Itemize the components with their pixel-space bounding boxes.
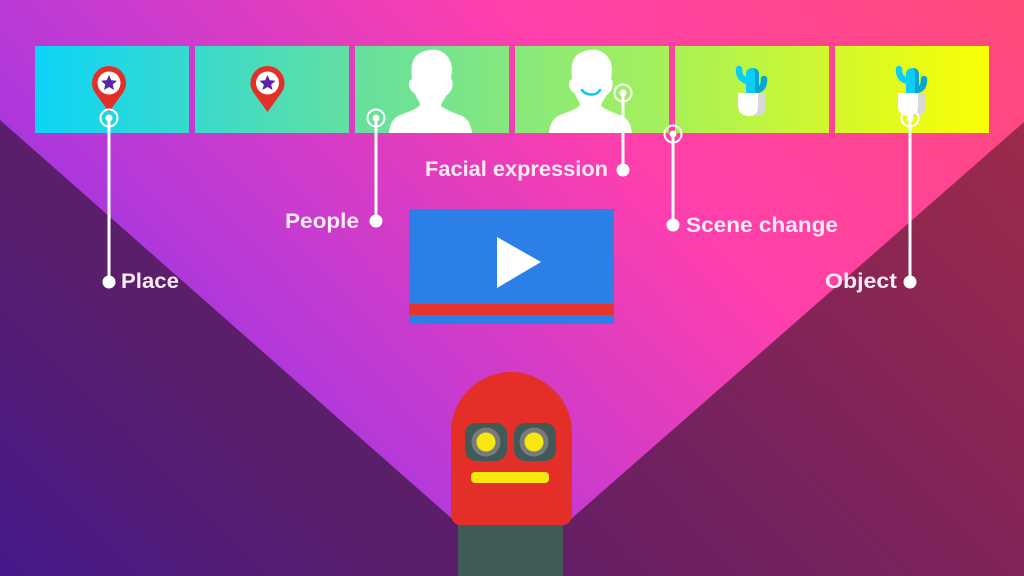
robot head: [451, 372, 572, 525]
left eye: [465, 423, 507, 461]
label: scene change: Scene change: [686, 214, 838, 237]
label: facial expression: Facial expression: [425, 158, 608, 181]
dark right wedge: [563, 122, 1024, 576]
frame 1 place: [35, 46, 189, 133]
callout: place: [100, 110, 179, 293]
label: place: Place: [121, 270, 179, 293]
icon: smile: [582, 90, 600, 94]
video player: [409, 209, 614, 324]
video frame strip: [35, 46, 989, 133]
progress bar: [409, 304, 614, 315]
icon: smiling person: [549, 50, 632, 133]
right eye: [514, 423, 556, 461]
callout: people: [285, 110, 384, 233]
frame 4 smiling person: [515, 46, 669, 133]
icon: play button: [497, 237, 541, 288]
dark left wedge: [0, 120, 458, 576]
callout: object: [825, 110, 918, 293]
icon: cactus 2: [898, 68, 926, 116]
icon: place pin 1: [92, 66, 126, 112]
frame 2 place: [195, 46, 349, 133]
player screen: [409, 209, 614, 324]
frame 6 cactus: [835, 46, 989, 133]
label: people: People: [285, 210, 359, 233]
callout: facial expression: [425, 84, 632, 181]
frame 5 cactus: [675, 46, 829, 133]
label: object: Object: [825, 270, 897, 293]
mouth: [471, 472, 549, 483]
callout: scene change: [664, 126, 838, 237]
icon: cactus 1: [738, 68, 766, 116]
robot neck: [458, 525, 563, 576]
robot: [451, 372, 572, 576]
icon: person: [389, 50, 472, 133]
frame 3 person: [355, 46, 509, 133]
icon: place pin 2: [250, 66, 284, 112]
